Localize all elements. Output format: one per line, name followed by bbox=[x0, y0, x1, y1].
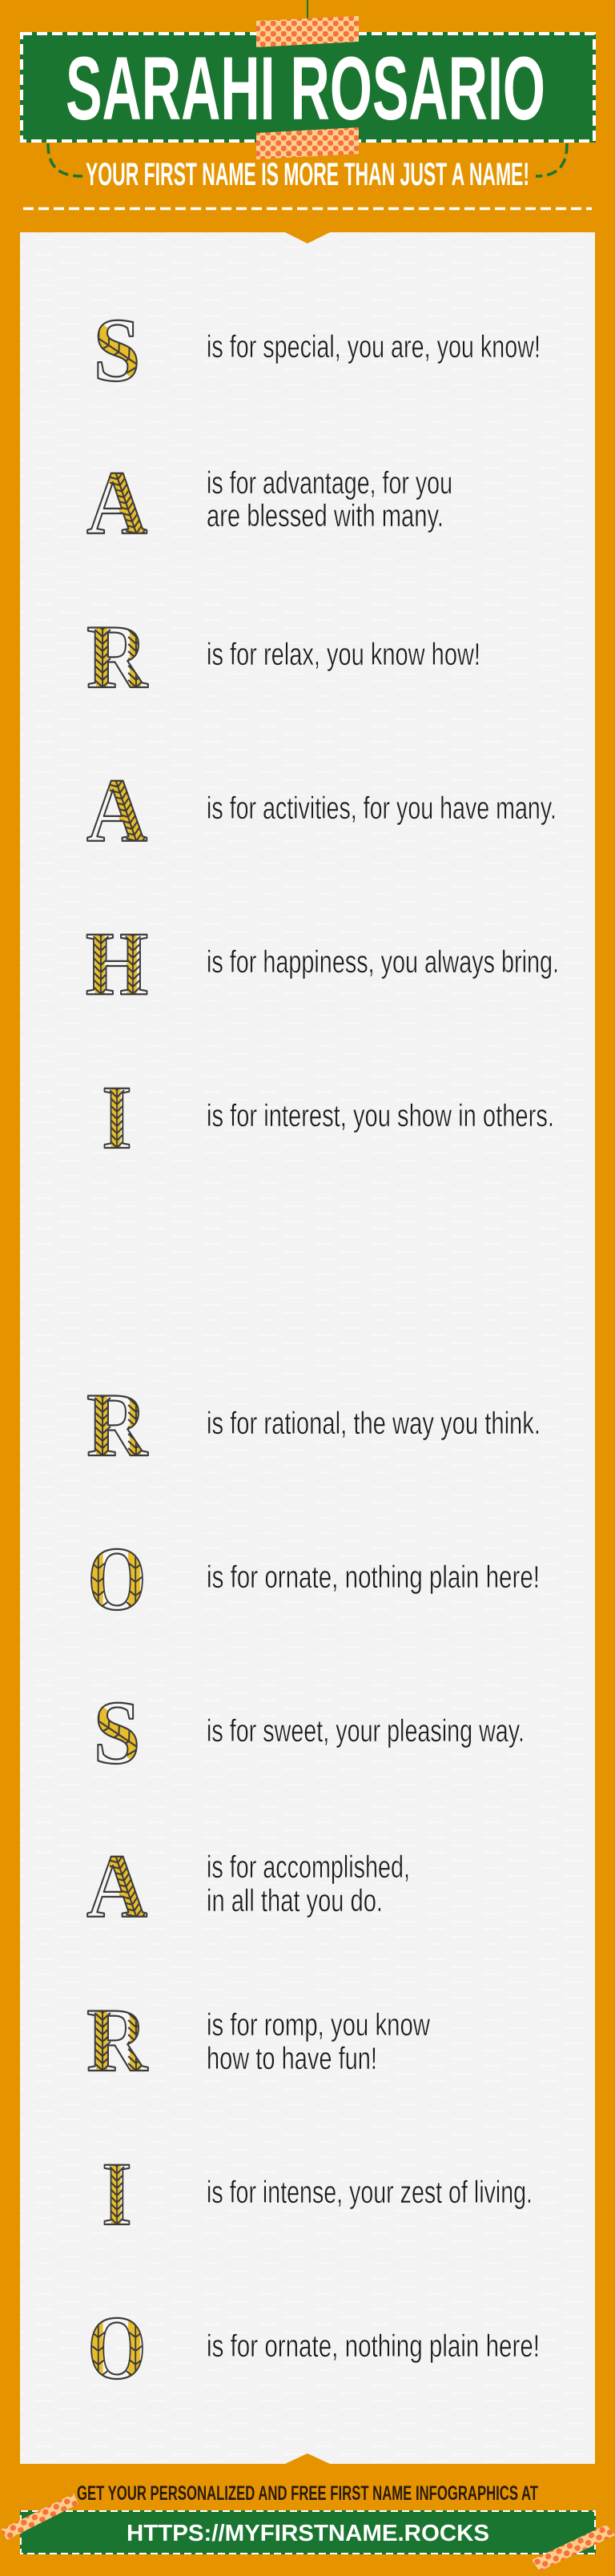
text: are blessed with many. bbox=[207, 499, 444, 533]
tape: top bbox=[256, 16, 359, 47]
row: S special bbox=[94, 300, 541, 400]
row: S sweet bbox=[94, 1683, 525, 1783]
row: H happiness bbox=[86, 915, 559, 1014]
letter O: O bbox=[88, 1529, 146, 1629]
letter S: S bbox=[94, 1683, 140, 1783]
letter A: A bbox=[86, 761, 147, 861]
letter I: I bbox=[102, 2144, 132, 2244]
letter O: O bbox=[88, 2298, 146, 2398]
text bbox=[207, 2008, 431, 2076]
row: A advantage bbox=[86, 453, 452, 553]
header bbox=[20, 0, 596, 208]
bracket: right bbox=[536, 143, 567, 176]
row: R romp bbox=[86, 1990, 431, 2091]
dashed rule bbox=[23, 207, 592, 210]
letter S: S bbox=[94, 300, 140, 400]
text: is for relax, you know how! bbox=[207, 638, 480, 672]
letter R: R bbox=[86, 1990, 148, 2091]
title banner bbox=[20, 32, 596, 143]
row: I interest bbox=[102, 1068, 554, 1168]
text bbox=[207, 466, 452, 533]
text: in all that you do. bbox=[207, 1884, 383, 1918]
footer bbox=[1, 2482, 615, 2571]
bracket: left bbox=[48, 143, 82, 176]
url: HTTPS://MYFIRSTNAME.ROCKS bbox=[127, 2521, 489, 2546]
text bbox=[207, 1850, 410, 1918]
tape: right bbox=[532, 2525, 615, 2571]
row: I intense bbox=[102, 2144, 533, 2244]
hanging line bbox=[307, 0, 308, 19]
letter A: A bbox=[86, 453, 147, 553]
letter I: I bbox=[102, 1068, 132, 1168]
letter H: H bbox=[86, 915, 148, 1014]
row: O ornate bbox=[88, 2298, 540, 2398]
text: is for advantage, for you bbox=[207, 466, 452, 501]
text: is for romp, you know bbox=[207, 2008, 431, 2043]
letter R: R bbox=[86, 607, 148, 707]
url banner bbox=[20, 2510, 596, 2554]
row: A accomplished bbox=[86, 1837, 410, 1937]
text: is for accomplished, bbox=[207, 1850, 410, 1885]
tape: bottom bbox=[256, 127, 359, 159]
letter A: A bbox=[86, 1837, 147, 1937]
row: R rational bbox=[86, 1375, 541, 1475]
row: O ornate bbox=[88, 1529, 540, 1629]
text: how to have fun! bbox=[207, 2042, 377, 2076]
letter R: R bbox=[86, 1375, 148, 1475]
row: A activities bbox=[86, 761, 557, 861]
row: R relax bbox=[86, 607, 480, 707]
tape: left bbox=[1, 2493, 78, 2540]
